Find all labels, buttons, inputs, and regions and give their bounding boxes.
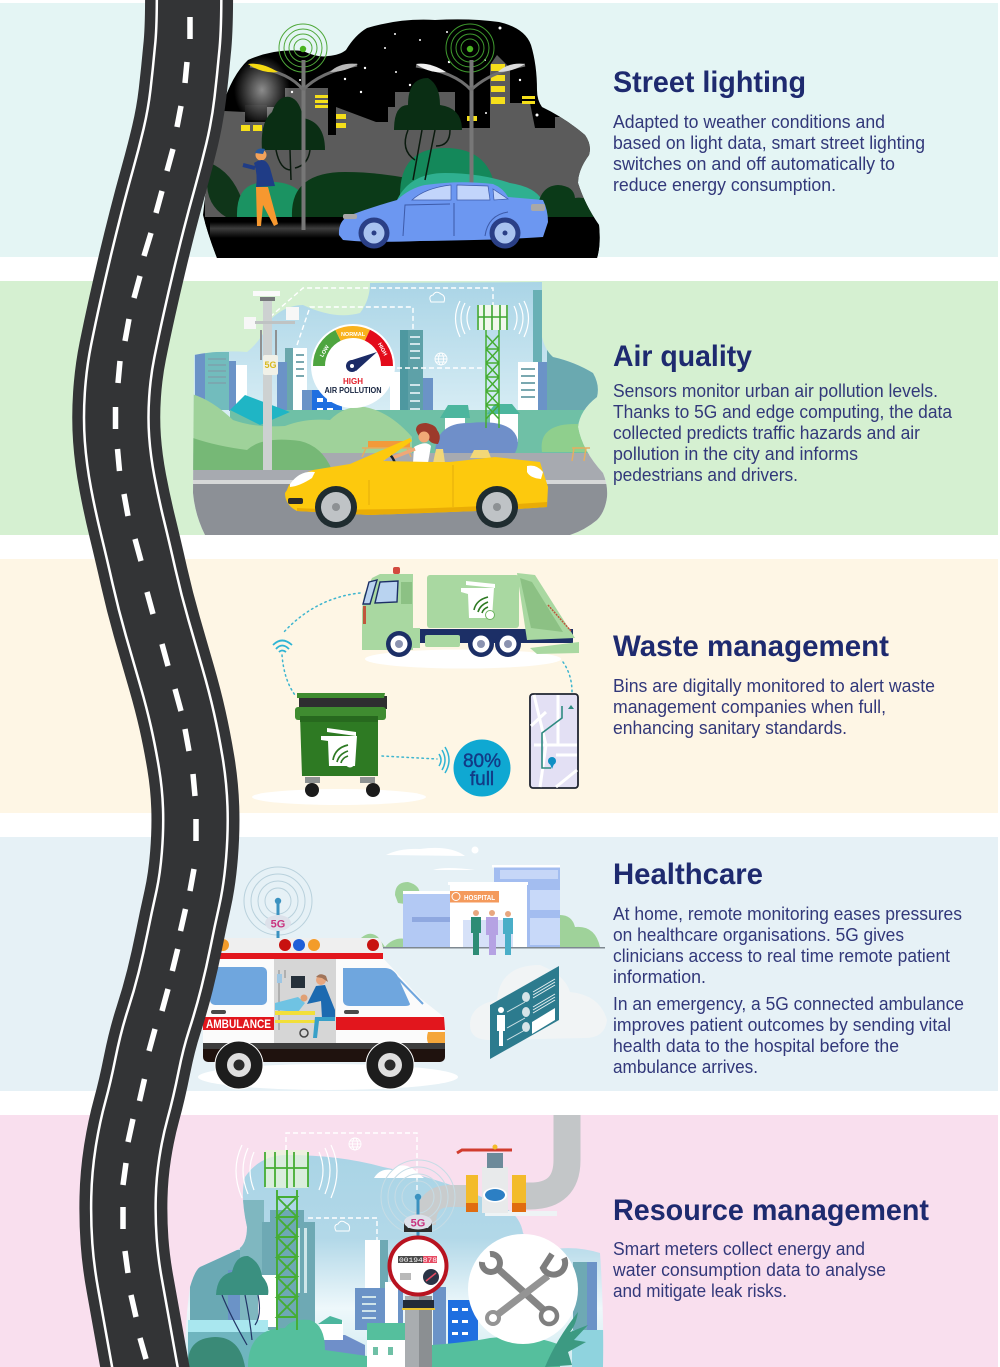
text block: waste management xyxy=(613,675,935,738)
heading: Waste management: Waste management xyxy=(613,630,889,663)
dashed data links xyxy=(270,288,493,368)
gauge: air pollution meter: HIGH xyxy=(376,342,388,357)
illustration: air quality city scene xyxy=(188,280,610,540)
icon: signal rings right lamp xyxy=(446,24,494,72)
gauge: air pollution meter: AIR POLLUTION xyxy=(324,386,382,395)
dashed data links xyxy=(286,1133,417,1240)
text block: resource management: Smart meters collect energy and xyxy=(613,1238,865,1259)
garbage truck xyxy=(362,567,579,668)
sensor pole with 5G box xyxy=(244,291,299,470)
heading: Healthcare: Healthcare xyxy=(613,858,763,891)
cell tower with signal arcs xyxy=(236,1145,337,1330)
text block: air quality: pedestrians and drivers. xyxy=(613,464,798,485)
icon: signal rings left lamp xyxy=(279,24,327,72)
illustration: waste management scene xyxy=(252,567,579,805)
car: blue sedan xyxy=(339,182,548,248)
text block: healthcare emergency: In an emergency, a 5G connected ambulance xyxy=(613,993,964,1014)
text block: healthcare emergency: improves patient outcomes by sending vital xyxy=(613,1014,951,1035)
hospital building xyxy=(361,865,605,948)
icon: smart bin on truck xyxy=(461,581,495,620)
smart water meter with 5G: 00194878 xyxy=(399,1257,437,1264)
icon: signal arcs to fill level xyxy=(439,747,449,773)
icon: cloud xyxy=(430,292,445,302)
heading: Resource management: Resource management xyxy=(613,1194,929,1227)
panel: healthcare background xyxy=(0,837,998,1091)
illustration: healthcare scene xyxy=(198,846,607,1090)
street lamp left xyxy=(248,60,358,230)
illustration: resource management scene xyxy=(180,1115,610,1367)
text block: waste management: management companies when full, xyxy=(613,696,886,717)
text block: healthcare at home: information. xyxy=(613,966,706,987)
gauge: air pollution meter xyxy=(311,324,395,408)
cell tower with signal arcs xyxy=(456,301,528,428)
text block: waste management: enhancing sanitary standards. xyxy=(613,717,847,738)
text block: healthcare at home: on healthcare organisations. 5G gives xyxy=(613,924,904,945)
icon: globe xyxy=(435,353,447,365)
text block: street lighting: based on light data, smart street lighting xyxy=(613,132,925,153)
clouds xyxy=(386,848,475,870)
dotted connection lines xyxy=(282,593,572,759)
icon: crossed wrenches xyxy=(468,1234,578,1344)
text block: healthcare at home: clinicians access to real time remote patient xyxy=(613,945,950,966)
panel: street lighting background xyxy=(0,3,998,257)
street lamp right xyxy=(416,60,525,195)
ambulance xyxy=(198,938,458,1090)
gauge: air pollution meter: HIGH xyxy=(343,377,363,386)
hospital staff figures xyxy=(471,910,513,955)
interior: patient and paramedic xyxy=(275,970,335,1038)
text block: healthcare emergency: ambulance arrives. xyxy=(613,1056,758,1077)
heading: Street lighting: Street lighting xyxy=(613,66,806,99)
text block: resource management: and mitigate leak risks. xyxy=(613,1280,787,1301)
phone with route map xyxy=(530,694,578,788)
car: yellow convertible with driver xyxy=(285,423,548,528)
panel: resource management background xyxy=(0,1115,998,1367)
ambulance: AMBULANCE xyxy=(206,1017,271,1031)
panel: air quality background xyxy=(0,281,998,535)
badge: 80% full: full xyxy=(470,769,494,790)
heading: Air quality: Air quality xyxy=(613,340,752,373)
gauge: air pollution meter: LOW xyxy=(319,344,331,359)
icon: smart bin on container xyxy=(321,728,357,768)
text block: waste management: Bins are digitally monitored to alert waste xyxy=(613,675,935,696)
panel: waste management background xyxy=(0,559,998,813)
text block: street lighting: reduce energy consumption. xyxy=(613,174,836,195)
text block: air quality: pollution in the city and informs xyxy=(613,443,858,464)
icon: wifi signal xyxy=(273,640,292,652)
text block: resource management: water consumption data to analyse xyxy=(612,1259,886,1280)
badge: 80% full: 80% xyxy=(463,751,501,772)
illustration: street lighting night scene xyxy=(203,19,600,258)
hospital building: HOSPITAL xyxy=(464,893,495,902)
text block: healthcare at home: At home, remote monitoring eases pressures xyxy=(613,903,962,924)
smart water meter with 5G: 5G xyxy=(411,1218,425,1230)
gauge: air pollution meter: NORMAL xyxy=(341,332,366,338)
icon: cloud xyxy=(335,1221,350,1231)
leafy plant xyxy=(545,1312,588,1367)
badge: 80% full xyxy=(454,740,510,796)
icon: 5G antenna with rings xyxy=(244,867,312,938)
text block: healthcare emergency xyxy=(613,993,964,1077)
winding road connecting all panels xyxy=(116,0,196,1367)
tree xyxy=(216,1256,268,1345)
text block: resource management xyxy=(612,1238,886,1301)
icon: globe xyxy=(349,1138,361,1150)
text block: healthcare emergency: health data to the hospital before the xyxy=(613,1035,899,1056)
text block: healthcare at home xyxy=(613,903,962,987)
sensor pole with 5G box: 5G xyxy=(264,360,277,370)
icon: 5G antenna with rings: 5G xyxy=(271,918,285,930)
text block: street lighting: switches on and off automatically to xyxy=(613,153,895,174)
wheelie bin 80% full xyxy=(252,693,426,805)
text block: air quality: collected predicts traffic hazards and air xyxy=(613,422,920,443)
text block: street lighting xyxy=(613,111,925,195)
figure: pedestrian with phone xyxy=(243,148,278,226)
water pipe and valve xyxy=(425,1115,567,1225)
park benches xyxy=(362,441,590,461)
text block: street lighting: Adapted to weather conditions and xyxy=(613,111,885,132)
text block: air quality: Thanks to 5G and edge computing, the data xyxy=(613,401,953,422)
text block: air quality xyxy=(613,380,953,485)
text block: air quality: Sensors monitor urban air pollution levels. xyxy=(613,380,938,401)
patient data board xyxy=(490,966,559,1059)
smart water meter with 5G xyxy=(381,1160,455,1367)
